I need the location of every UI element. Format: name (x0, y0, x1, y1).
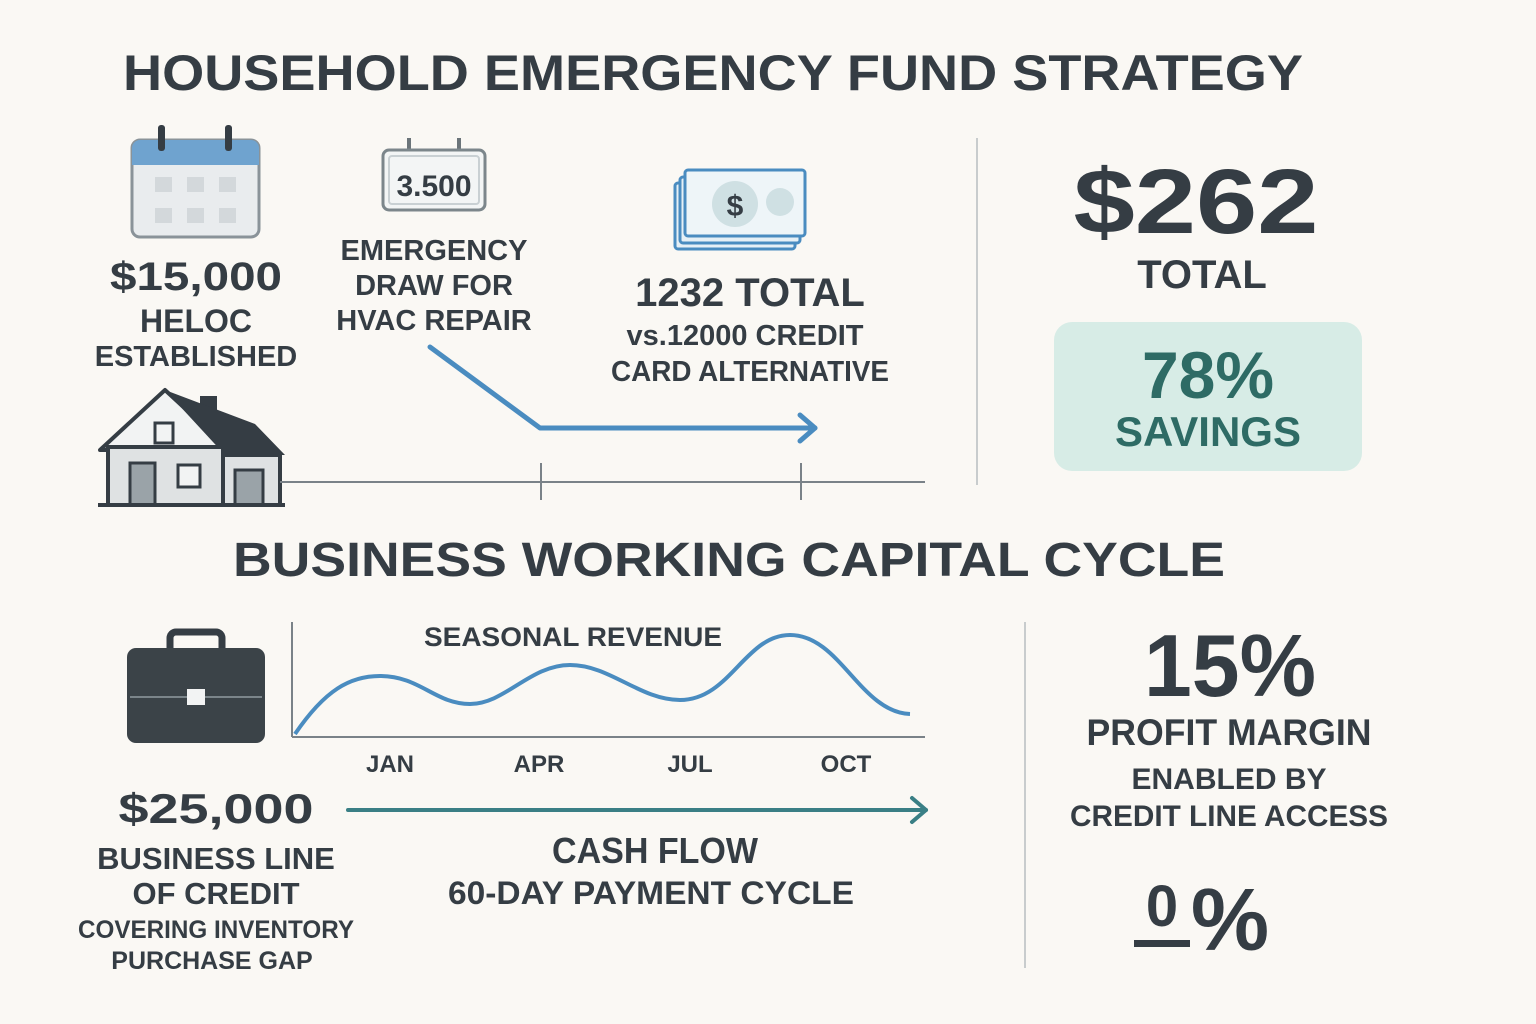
text: business line of credit: PURCHASE GAP (111, 947, 313, 975)
callout: 78% savings (1054, 322, 1362, 471)
icon: sign 3.500 (383, 138, 485, 210)
chart: seasonal revenue (292, 622, 925, 778)
text: business line of credit (78, 785, 354, 975)
stat: 15% profit margin: PROFIT MARGIN (1086, 712, 1372, 753)
stat: 15% profit margin: CREDIT LINE ACCESS (1070, 800, 1388, 833)
text: 1232 total: CARD ALTERNATIVE (611, 356, 889, 388)
chart: seasonal revenue: SEASONAL REVENUE (424, 622, 722, 652)
text: cash flow: 60-DAY PAYMENT CYCLE (448, 875, 854, 911)
stat: $262 total (1074, 151, 1318, 297)
stat: 0%: % (1191, 870, 1269, 969)
stat: 15% profit margin (1070, 616, 1388, 833)
icon: money (675, 170, 805, 249)
text: HELOC: HELOC (140, 303, 252, 339)
text: emergency draw: EMERGENCY (341, 235, 527, 267)
text: cash flow (448, 830, 854, 911)
chart: seasonal revenue: JUL (667, 751, 713, 778)
icon: sign 3.500: 3.500 (396, 170, 472, 203)
icon: money: $ (727, 190, 744, 223)
heading: business: BUSINESS WORKING CAPITAL CYCLE (233, 534, 1225, 587)
stat: $262 total: $262 (1074, 151, 1318, 253)
text: emergency draw: DRAW FOR (355, 270, 513, 302)
icon: calendar (132, 125, 259, 237)
text: 1232 total: vs.12000 CREDIT (627, 320, 864, 352)
stat: 0%: 0 (1146, 874, 1178, 939)
text: business line of credit: BUSINESS LINE (97, 841, 335, 876)
text: HELOC (95, 255, 297, 373)
title: HOUSEHOLD EMERGENCY FUND STRATEGY (123, 45, 1303, 101)
text: emergency draw (336, 235, 532, 337)
stat: $262 total: TOTAL (1137, 253, 1267, 297)
callout: 78% savings: 78% (1142, 338, 1274, 412)
callout: 78% savings: SAVINGS (1115, 408, 1301, 455)
icon: house (98, 390, 285, 505)
chart: seasonal revenue: JAN (366, 751, 414, 778)
text: emergency draw: HVAC REPAIR (336, 305, 532, 337)
text: business line of credit: $25,000 (118, 785, 314, 832)
text: cash flow: CASH FLOW (552, 830, 758, 871)
text: business line of credit: OF CREDIT (132, 876, 300, 911)
stat: 0% (1134, 870, 1269, 969)
text: 1232 total: 1232 TOTAL (635, 271, 865, 315)
stat: 15% profit margin: ENABLED BY (1131, 763, 1327, 796)
arrow: cash flow (348, 798, 926, 822)
arrow: draw line (430, 347, 815, 441)
stat: 15% profit margin: 15% (1144, 616, 1316, 715)
text: business line of credit: COVERING INVENTORY (78, 916, 354, 944)
chart: seasonal revenue: APR (514, 751, 564, 778)
text: 1232 total (611, 271, 889, 388)
text: HELOC: ESTABLISHED (95, 341, 297, 373)
timeline (280, 463, 925, 500)
text: HELOC: $15,000 (110, 255, 282, 299)
chart: seasonal revenue: OCT (821, 751, 872, 778)
icon: briefcase (127, 632, 265, 743)
